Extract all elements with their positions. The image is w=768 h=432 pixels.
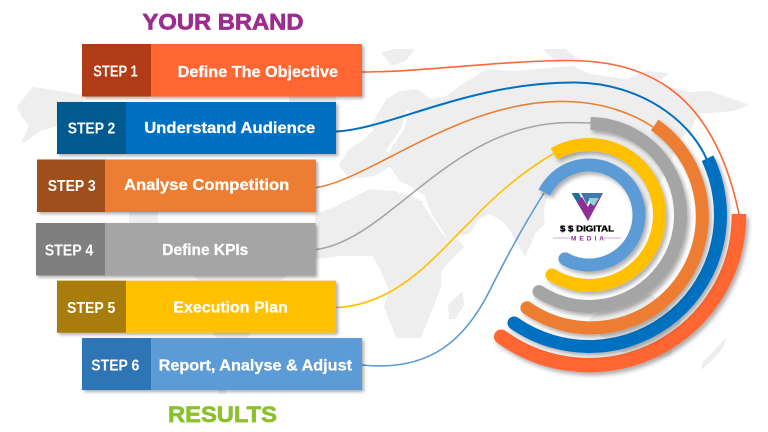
ring: gray	[532, 124, 681, 306]
panel: step 1	[82, 44, 362, 96]
connector: step 3 to orange ring	[316, 101, 653, 188]
ring: orange	[520, 125, 702, 328]
connector: step 5 to yellow ring	[336, 154, 553, 308]
panel: step 2: STEP 2	[68, 120, 115, 138]
logo subtext: MEDIA	[571, 236, 604, 242]
panel: step 6: STEP 6	[91, 358, 140, 375]
heading: results: RESULTS	[168, 402, 277, 427]
panel: step 1: Define The Objective	[178, 64, 338, 81]
panel: step 1: STEP 1	[93, 64, 138, 80]
panel: step 2	[57, 102, 336, 154]
panel: step 2: Understand Audience	[144, 120, 315, 137]
connector: step 6 to light blue ring	[362, 193, 544, 366]
background world map	[18, 50, 747, 393]
panel: step 4: Define KPIs	[162, 242, 248, 259]
panel: step 4	[36, 223, 316, 276]
panel: step 5: STEP 5	[67, 300, 116, 317]
panel: step 4: STEP 4	[45, 243, 94, 260]
panel: step 6	[82, 338, 362, 390]
panel: step 3: Analyse Competition	[124, 177, 289, 194]
panel: step 5	[57, 281, 336, 333]
connector: step 1 to red ring	[362, 60, 739, 214]
panel: step 3: STEP 3	[48, 178, 96, 195]
logo: S S Digital Media	[553, 193, 621, 242]
ring: light blue	[544, 165, 639, 265]
ring: yellow	[546, 144, 660, 285]
panel: step 3	[37, 160, 316, 212]
heading: your brand: YOUR BRAND	[142, 10, 304, 34]
icon: logo mark	[572, 193, 603, 221]
panel: step 5: Execution Plan	[173, 299, 288, 316]
logo text: $ $ DIGITAL	[560, 224, 614, 234]
ring: blue	[508, 158, 720, 346]
ring: red	[494, 214, 739, 365]
connector: step 2 to blue ring	[336, 82, 707, 160]
connector: step 4 to gray ring	[316, 122, 592, 250]
panel: step 6: Report, Analyse & Adjust	[159, 357, 353, 374]
